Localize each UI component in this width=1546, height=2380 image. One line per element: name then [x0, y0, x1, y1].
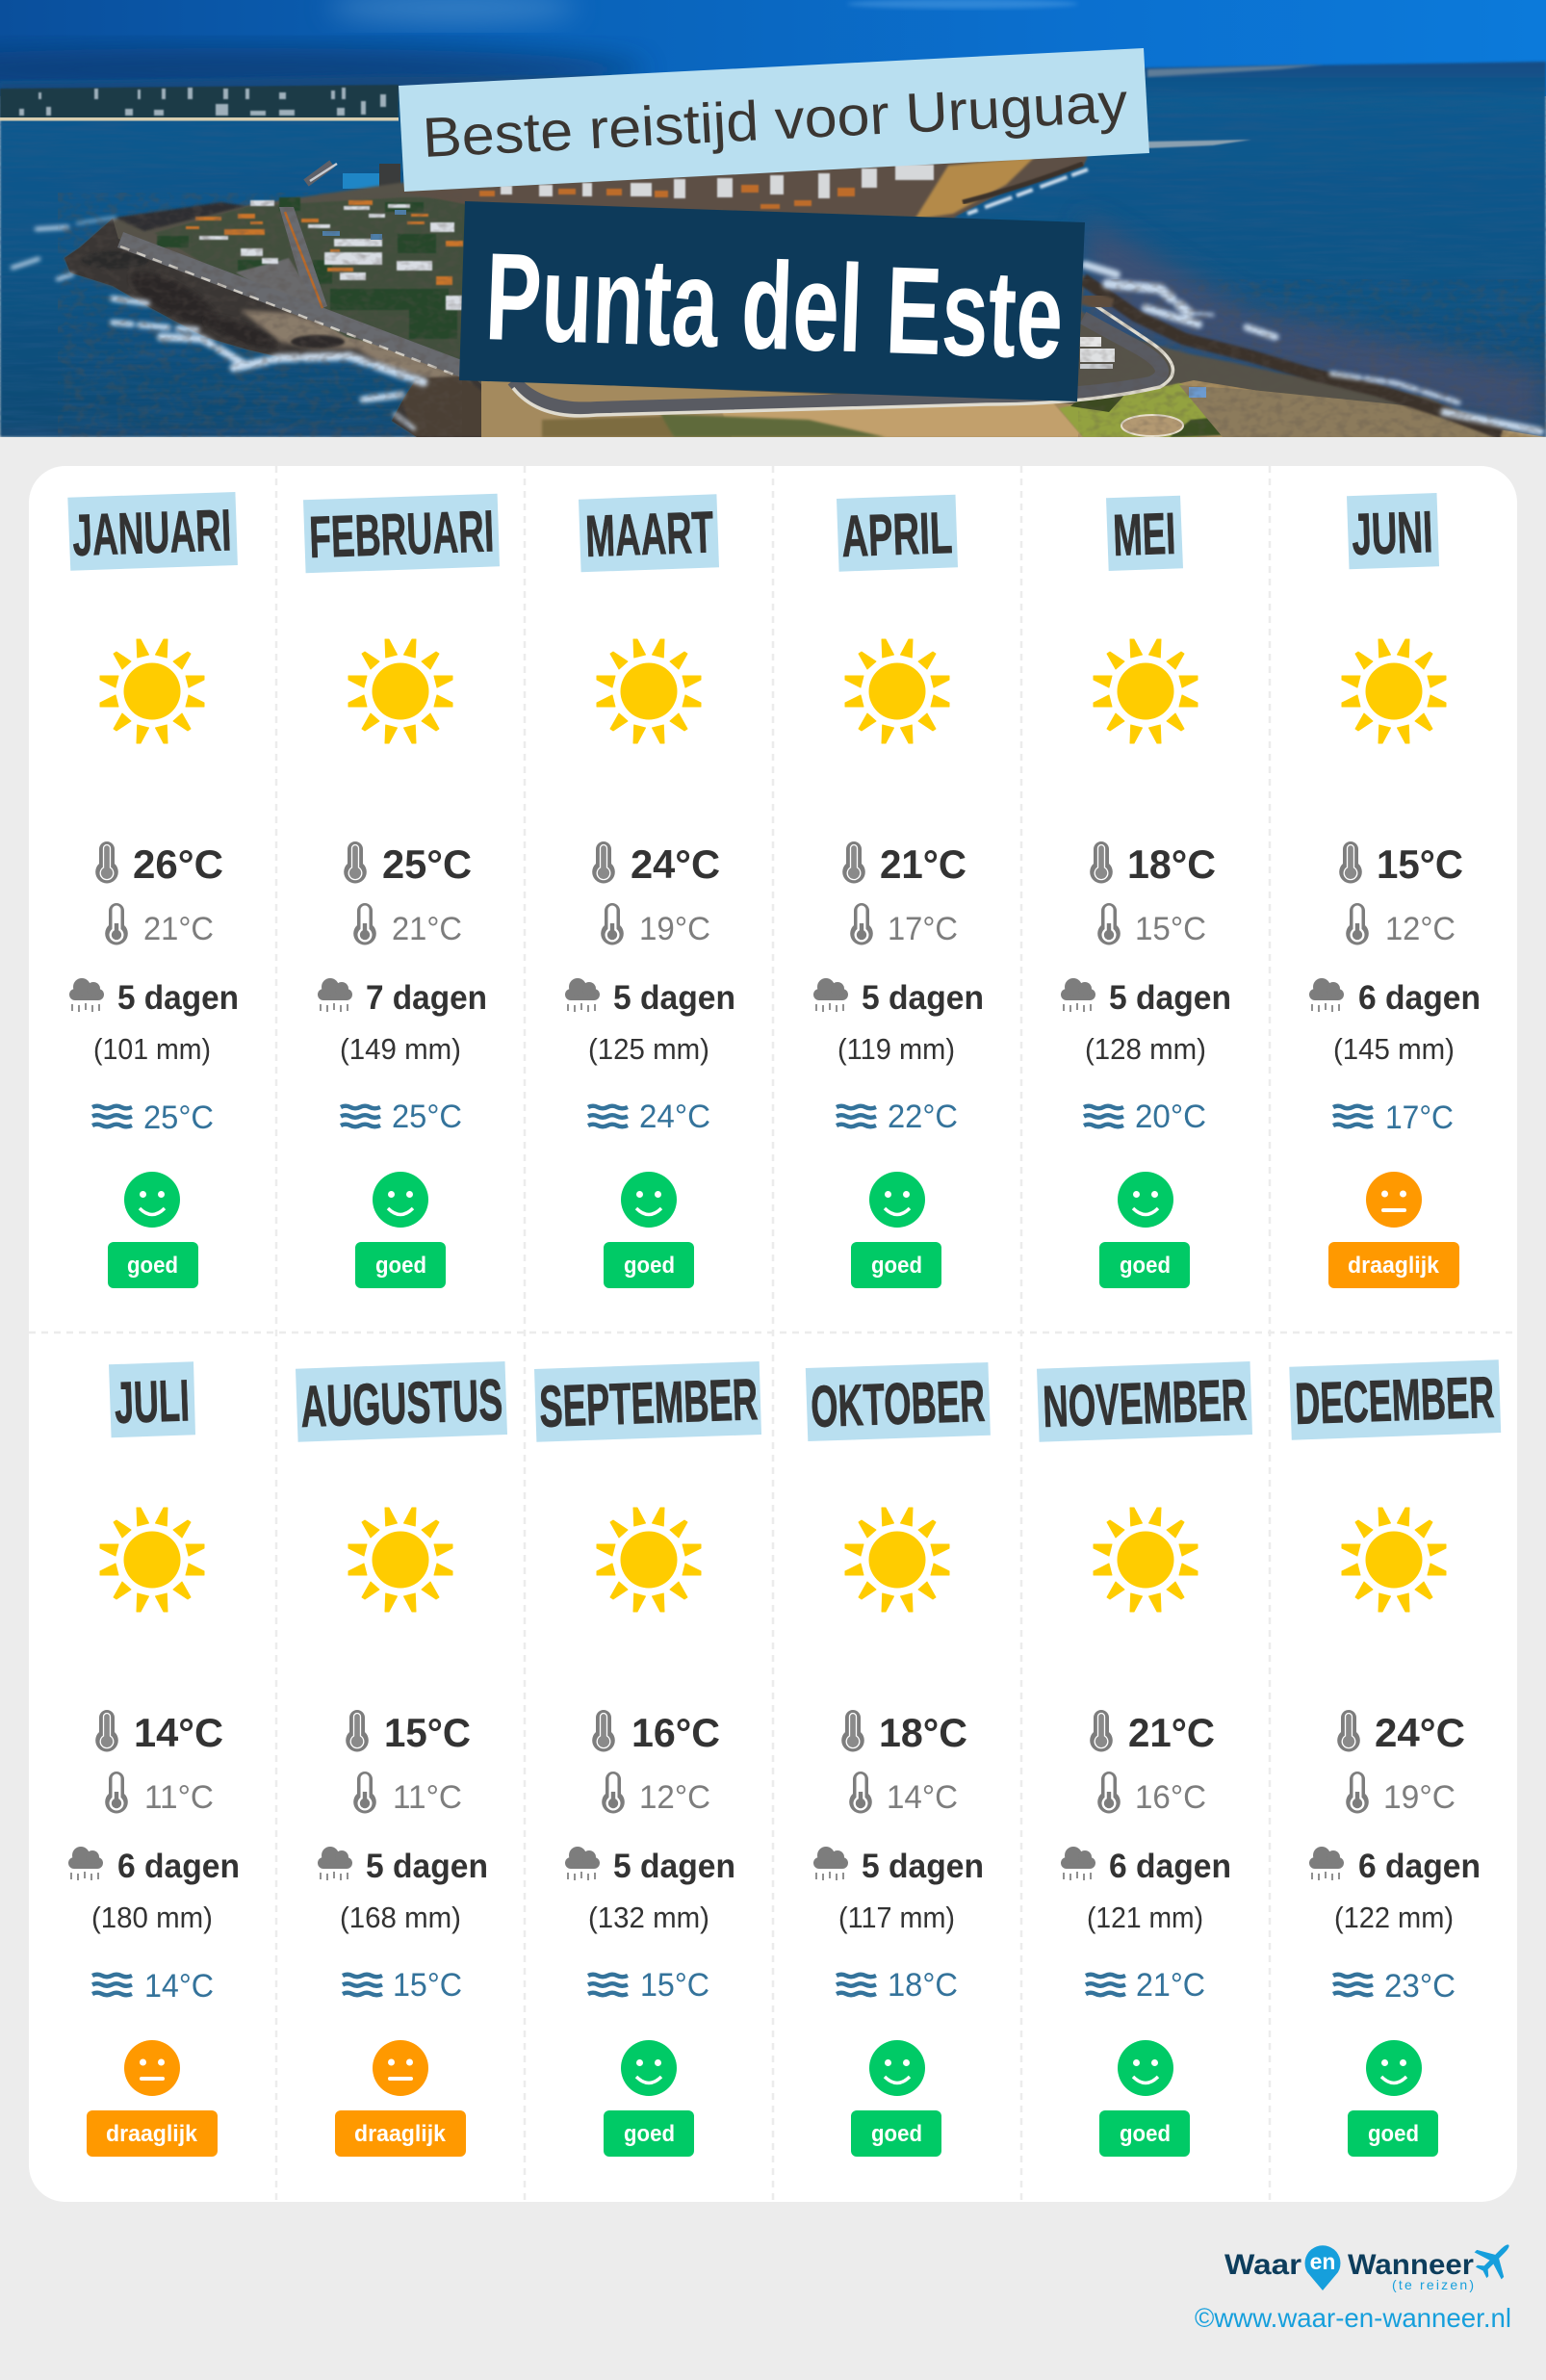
- column: september: [534, 1361, 761, 2157]
- icon: sun: [348, 1508, 452, 1612]
- rating: tolerable: [87, 2040, 218, 2157]
- helipad: [1121, 415, 1183, 436]
- logo: Waar en Wanneer: [1224, 2232, 1522, 2292]
- high temperature: [346, 1710, 471, 1755]
- rain days: 6 dagen: [1358, 1848, 1481, 1885]
- rain days: [813, 1847, 984, 1885]
- rating: good: goed: [1120, 2121, 1171, 2147]
- sea temperature: [1084, 1099, 1206, 1135]
- low temperature: 12°C: [1385, 911, 1456, 947]
- high temperature: 24°C: [631, 841, 720, 887]
- high temperature: [592, 1710, 720, 1755]
- rainfall: (119 mm): [837, 1032, 955, 1066]
- rating: tolerable: [335, 2040, 466, 2157]
- rain days: [565, 978, 735, 1017]
- rain days: 5 dagen: [1109, 979, 1231, 1017]
- high temperature: 15°C: [384, 1710, 471, 1755]
- icon: airplane: [1468, 2232, 1522, 2286]
- sea temperature: 24°C: [639, 1099, 710, 1135]
- heading: juni: JUNI: [1351, 499, 1433, 567]
- bottom land and road: [481, 380, 1546, 437]
- rain days: [318, 978, 487, 1017]
- heading: mei: MEI: [1112, 501, 1176, 568]
- heading: april: [837, 495, 958, 572]
- low temperature: 17°C: [888, 911, 958, 947]
- sea temperature: 18°C: [888, 1967, 958, 2004]
- column: mei: [1061, 496, 1231, 1288]
- high temperature: [95, 1710, 223, 1755]
- low temperature: [353, 903, 462, 947]
- high temperature: [344, 841, 472, 887]
- rain days: 5 dagen: [613, 1848, 735, 1885]
- rating: good: [604, 2040, 694, 2157]
- high temperature: 21°C: [1128, 1710, 1215, 1755]
- rain days: 5 dagen: [613, 979, 735, 1017]
- rating: good: goed: [1368, 2121, 1419, 2147]
- low temperature: 12°C: [639, 1779, 710, 1816]
- high temperature: 24°C: [1375, 1710, 1465, 1755]
- sea temperature: 17°C: [1385, 1099, 1454, 1136]
- rating: good: [108, 1172, 198, 1288]
- rain days: 6 dagen: [1358, 979, 1481, 1017]
- sea temperature: [343, 1967, 462, 2004]
- icon: sun: [1342, 1508, 1446, 1612]
- rainfall: (122 mm): [1334, 1901, 1454, 1934]
- rating: good: [604, 1172, 694, 1288]
- high temperature: 15°C: [1377, 841, 1463, 887]
- heading: januari: JANUARI: [71, 497, 232, 568]
- land base: [64, 157, 1540, 437]
- low temperature: 19°C: [639, 911, 710, 947]
- sea temperature: [588, 1967, 709, 2004]
- high temperature: [592, 841, 720, 887]
- surf: [13, 218, 1540, 431]
- rating: good: [851, 2040, 941, 2157]
- rating: good: goed: [375, 1253, 426, 1279]
- column: juli: [68, 1361, 240, 2157]
- rain days: [1061, 978, 1231, 1017]
- low temperature: [1097, 1772, 1206, 1816]
- heading: juli: [109, 1361, 195, 1437]
- low temperature: [850, 903, 958, 947]
- rain days: [1061, 1847, 1231, 1885]
- low temperature: 11°C: [393, 1779, 462, 1816]
- high temperature: 25°C: [382, 841, 472, 887]
- rain days: 6 dagen: [1109, 1848, 1231, 1885]
- rocks left: [64, 219, 481, 437]
- column: januari: [67, 492, 239, 1288]
- rating: tolerable: [1328, 1172, 1459, 1288]
- rating: good: [1348, 2040, 1438, 2157]
- subtitle banner: [399, 48, 1149, 192]
- column: maart: [565, 494, 735, 1288]
- rating: good: [1099, 2040, 1190, 2157]
- low temperature: [105, 1772, 214, 1816]
- low temperature: [1346, 1772, 1456, 1816]
- high temperature: 16°C: [631, 1710, 720, 1755]
- column: november: [1037, 1361, 1252, 2157]
- rain days: [1309, 978, 1481, 1017]
- sea temperature: 21°C: [1136, 1967, 1205, 2004]
- high temperature: [841, 1710, 967, 1755]
- high temperature: 18°C: [879, 1710, 967, 1755]
- column: februari: [303, 494, 500, 1288]
- rating: good: [851, 1172, 941, 1288]
- logo: Waar en Wanneer: Waar: [1224, 2249, 1301, 2281]
- rating: good: goed: [1120, 1253, 1171, 1279]
- heading: november: NOVEMBER: [1042, 1367, 1248, 1439]
- rain days: [813, 978, 984, 1017]
- rainfall: (121 mm): [1087, 1901, 1203, 1934]
- heading: februari: FEBRUARI: [308, 498, 495, 570]
- rain days: [318, 1847, 488, 1885]
- sea temperature: [92, 1099, 214, 1136]
- high temperature: 14°C: [134, 1710, 223, 1755]
- rain days: 7 dagen: [366, 979, 487, 1017]
- rating: good: [1099, 1172, 1190, 1288]
- sea temperature: 20°C: [1135, 1099, 1206, 1135]
- heading: maart: MAART: [584, 499, 714, 569]
- column: augustus: [296, 1361, 507, 2157]
- rainfall: (145 mm): [1333, 1032, 1455, 1066]
- subtitle banner: Beste reistijd voor Uruguay: [421, 71, 1129, 169]
- icon: sun: [1094, 1508, 1198, 1612]
- houses zone left: [154, 197, 472, 366]
- heading: september: SEPTEMBER: [538, 1366, 759, 1439]
- sea temperature: 15°C: [393, 1967, 462, 2004]
- houses wedge between title boxes: [399, 154, 1088, 218]
- sea temperature: 14°C: [144, 1968, 214, 2005]
- low temperature: [601, 903, 710, 947]
- rating: tolerable: draaglijk: [106, 2121, 198, 2147]
- icon: sun: [100, 639, 204, 743]
- heading: oktober: [806, 1362, 991, 1441]
- high temperature: [1090, 841, 1216, 887]
- rating: good: goed: [624, 1253, 675, 1279]
- sea temperature: [1333, 1099, 1454, 1136]
- marina: [306, 164, 332, 183]
- rainfall: (180 mm): [91, 1901, 213, 1934]
- low temperature: 21°C: [143, 911, 214, 947]
- icon: sun: [597, 1508, 701, 1612]
- low temperature: [105, 903, 214, 947]
- icon: map pin: en: [1310, 2249, 1335, 2274]
- logo: Waar en Wanneer: Wanneer: [1348, 2249, 1474, 2281]
- rating: tolerable: draaglijk: [1348, 1253, 1440, 1279]
- heading: november: [1037, 1361, 1252, 1442]
- heading: oktober: OKTOBER: [810, 1368, 986, 1439]
- rating: good: goed: [871, 2121, 922, 2147]
- sea temperature: [588, 1099, 710, 1135]
- icon: sun: [1094, 639, 1198, 743]
- sea temperature: [341, 1099, 462, 1135]
- panel: monthly climate table: [29, 466, 1517, 2202]
- rating: tolerable: draaglijk: [354, 2121, 447, 2147]
- sea temperature: [92, 1968, 214, 2005]
- column: december: [1289, 1359, 1501, 2157]
- heading: augustus: [296, 1361, 507, 1442]
- rating: good: [355, 1172, 446, 1288]
- sea temperature: [1086, 1967, 1205, 2004]
- rain days: 6 dagen: [117, 1848, 240, 1885]
- rain days: [1309, 1847, 1481, 1885]
- high temperature: 21°C: [880, 841, 966, 887]
- rain days: [68, 1847, 240, 1885]
- icon: sun: [845, 639, 949, 743]
- low temperature: [849, 1772, 958, 1816]
- sea temperature: 25°C: [392, 1099, 462, 1135]
- high temperature: 26°C: [133, 841, 223, 887]
- sea temperature: [837, 1967, 958, 2004]
- heading: januari: [67, 492, 238, 571]
- icon: sun: [348, 639, 452, 743]
- sea temperature: 22°C: [888, 1099, 958, 1135]
- low temperature: 14°C: [887, 1779, 958, 1816]
- right rocks: [1083, 279, 1502, 433]
- sea temperature: [1333, 1968, 1456, 2005]
- rainfall: (168 mm): [340, 1901, 461, 1934]
- sea temperature: 15°C: [640, 1967, 709, 2004]
- icon: sun: [845, 1508, 949, 1612]
- title banner: Punta del Este: [483, 227, 1066, 385]
- high temperature: [842, 841, 966, 887]
- heading: augustus: AUGUSTUS: [299, 1367, 503, 1439]
- sea temperature: 25°C: [143, 1099, 214, 1136]
- low temperature: 16°C: [1135, 1779, 1206, 1816]
- heading: juli: JULI: [114, 1367, 191, 1436]
- title banner: [459, 201, 1085, 401]
- heading: april: APRIL: [840, 500, 953, 569]
- icon: sun: [1342, 639, 1446, 743]
- heading: maart: [579, 494, 719, 572]
- rating: good: goed: [871, 1253, 922, 1279]
- low temperature: [1346, 903, 1456, 947]
- rain days: [565, 1847, 735, 1885]
- column: april: [813, 495, 984, 1288]
- rain days: 5 dagen: [862, 1848, 984, 1885]
- icon: map pin: [1305, 2245, 1341, 2290]
- rating: good: goed: [127, 1253, 178, 1279]
- rainfall: (149 mm): [340, 1032, 461, 1066]
- icon: sun: [597, 639, 701, 743]
- sea temperature: [837, 1099, 958, 1135]
- low temperature: [353, 1772, 462, 1816]
- column: oktober: [806, 1362, 991, 2157]
- low temperature: 21°C: [392, 911, 462, 947]
- sea temperature: 23°C: [1384, 1968, 1456, 2005]
- rainfall: (101 mm): [93, 1032, 211, 1066]
- high temperature: [1339, 841, 1463, 887]
- heading: juni: [1347, 493, 1439, 569]
- low temperature: 11°C: [144, 1779, 214, 1816]
- heading: september: [534, 1361, 761, 1442]
- low temperature: [602, 1772, 710, 1816]
- rating: good: goed: [624, 2121, 675, 2147]
- rainfall: (128 mm): [1085, 1032, 1206, 1066]
- icon: sun: [100, 1508, 204, 1612]
- heading: mei: [1106, 496, 1183, 571]
- column: juni: [1309, 493, 1481, 1288]
- header photo: aerial view of Punta del Este: [0, 0, 1546, 443]
- rainfall: (125 mm): [588, 1032, 709, 1066]
- low temperature: 19°C: [1383, 1779, 1456, 1816]
- rain days: [69, 978, 239, 1017]
- rain days: 5 dagen: [862, 979, 984, 1017]
- high temperature: [1090, 1710, 1215, 1755]
- website credit: ©www.waar-en-wanneer.nl: [1195, 2303, 1511, 2333]
- rain days: 5 dagen: [117, 979, 239, 1017]
- heading: februari: [303, 494, 500, 573]
- low temperature: 15°C: [1135, 911, 1206, 947]
- high temperature: 18°C: [1127, 841, 1216, 887]
- low temperature: [1097, 903, 1206, 947]
- rainfall: (117 mm): [838, 1901, 955, 1934]
- logo: Waar en Wanneer: (te reizen): [1392, 2277, 1474, 2292]
- rain days: 5 dagen: [366, 1848, 488, 1885]
- rainfall: (132 mm): [588, 1901, 709, 1934]
